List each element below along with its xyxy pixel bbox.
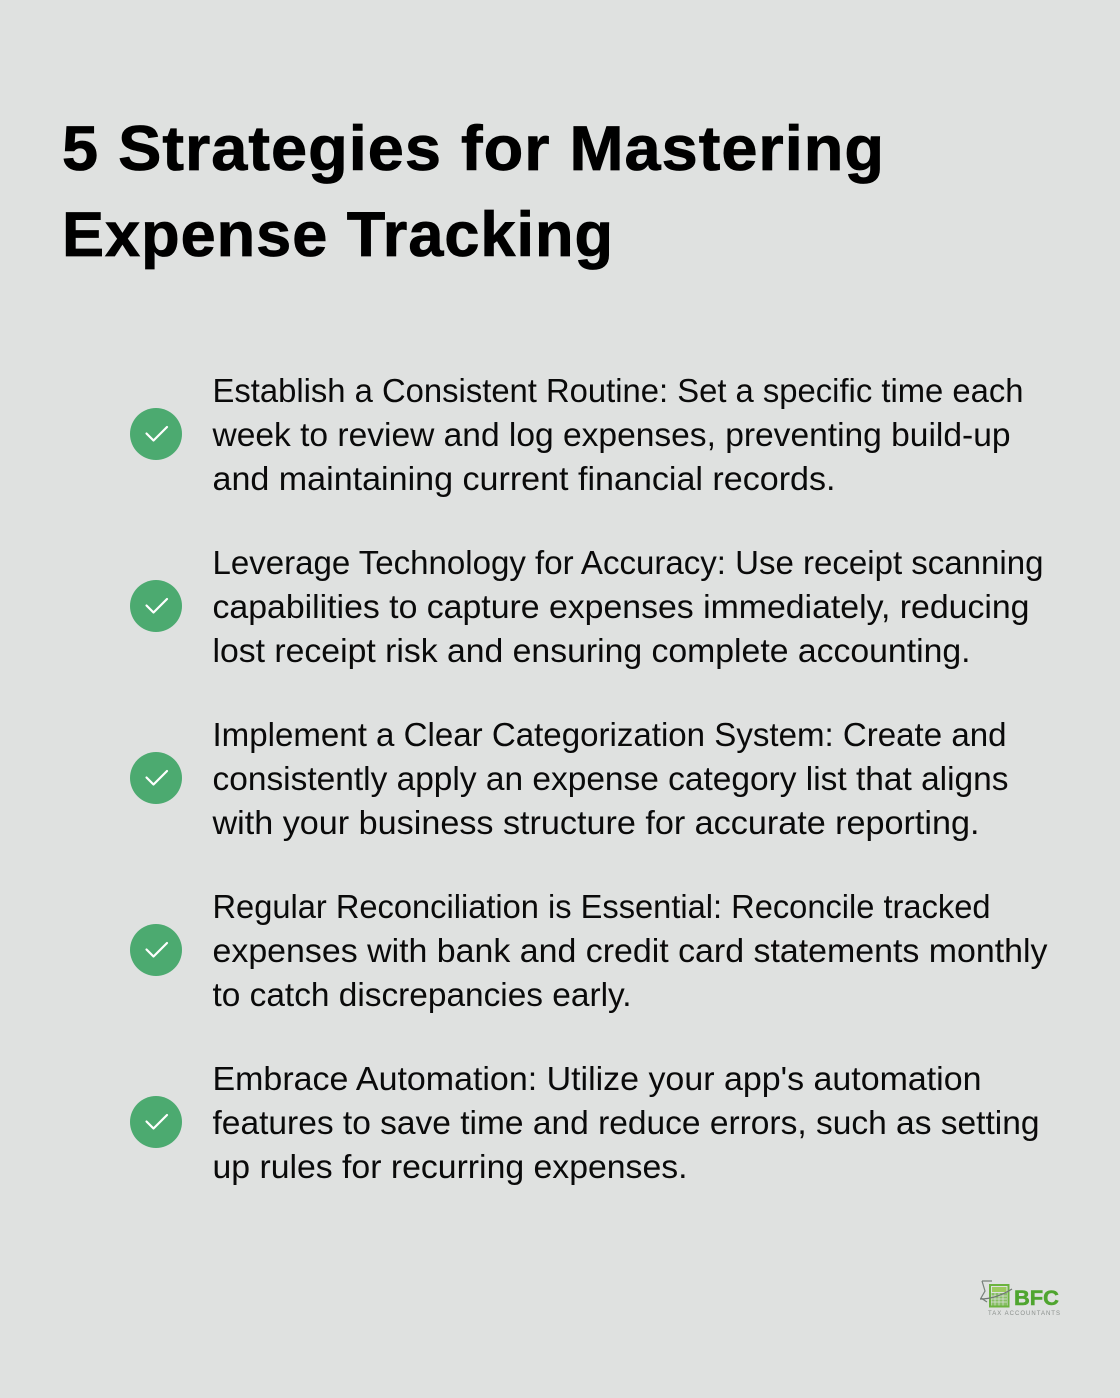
- logo wordmark: BFC: [1014, 1287, 1059, 1310]
- text: reconciliation: [212, 888, 1048, 1013]
- icon: check badge: [130, 1096, 182, 1148]
- icon: check badge: [130, 580, 182, 632]
- list item: routine: [130, 372, 1024, 497]
- text: automation: [212, 1060, 1040, 1185]
- list item: categorization: [130, 716, 1008, 841]
- text: automation: Embrace Automation: Utilize your app's automation: [212, 1060, 982, 1097]
- list item: reconciliation: [130, 888, 1048, 1013]
- text: technology: [212, 544, 1044, 669]
- icon: check badge: [130, 408, 182, 460]
- text: technology: lost receipt risk and ensuring complete accounting.: [212, 632, 971, 669]
- text: routine: Establish a Consistent Routine: Set a specific time each: [212, 372, 1024, 409]
- text: categorization: with your business structure for accurate reporting.: [211, 804, 979, 841]
- text: categorization: [211, 716, 1008, 841]
- title: [62, 114, 885, 270]
- text: automation: up rules for recurring expenses.: [212, 1148, 688, 1185]
- icon: check badge: [130, 752, 182, 804]
- text: reconciliation: to catch discrepancies early.: [212, 976, 632, 1013]
- text: technology: Leverage Technology for Accuracy: Use receipt scanning: [212, 544, 1044, 581]
- title: Expense Tracking: [62, 200, 614, 270]
- text: routine: week to review and log expenses, preventing build-up: [211, 416, 1011, 453]
- text: automation: features to save time and reduce errors, such as setting: [212, 1104, 1040, 1141]
- list item: technology: [130, 544, 1044, 669]
- text: technology: capabilities to capture expenses immediately, reducing: [212, 588, 1030, 625]
- text: routine: [211, 372, 1024, 497]
- text: reconciliation: expenses with bank and credit card statements monthly: [212, 932, 1048, 969]
- text: routine: and maintaining current financial records.: [212, 460, 836, 497]
- icon: calculator: [980, 1281, 1012, 1306]
- icon: check badge: [130, 924, 182, 976]
- text: categorization: consistently apply an expense category list that aligns: [212, 760, 1008, 797]
- list item: automation: [130, 1060, 1040, 1185]
- text: reconciliation: Regular Reconciliation is Essential: Reconcile tracked: [212, 888, 990, 925]
- logo: BFC Tax Accountants: [980, 1281, 1060, 1317]
- logo tagline: TAX ACCOUNTANTS: [988, 1311, 1060, 1317]
- text: categorization: Implement a Clear Categorization System: Create and: [212, 716, 1006, 753]
- title: 5 Strategies for Mastering: [62, 114, 885, 184]
- panel: strategy list: [130, 372, 1048, 1185]
